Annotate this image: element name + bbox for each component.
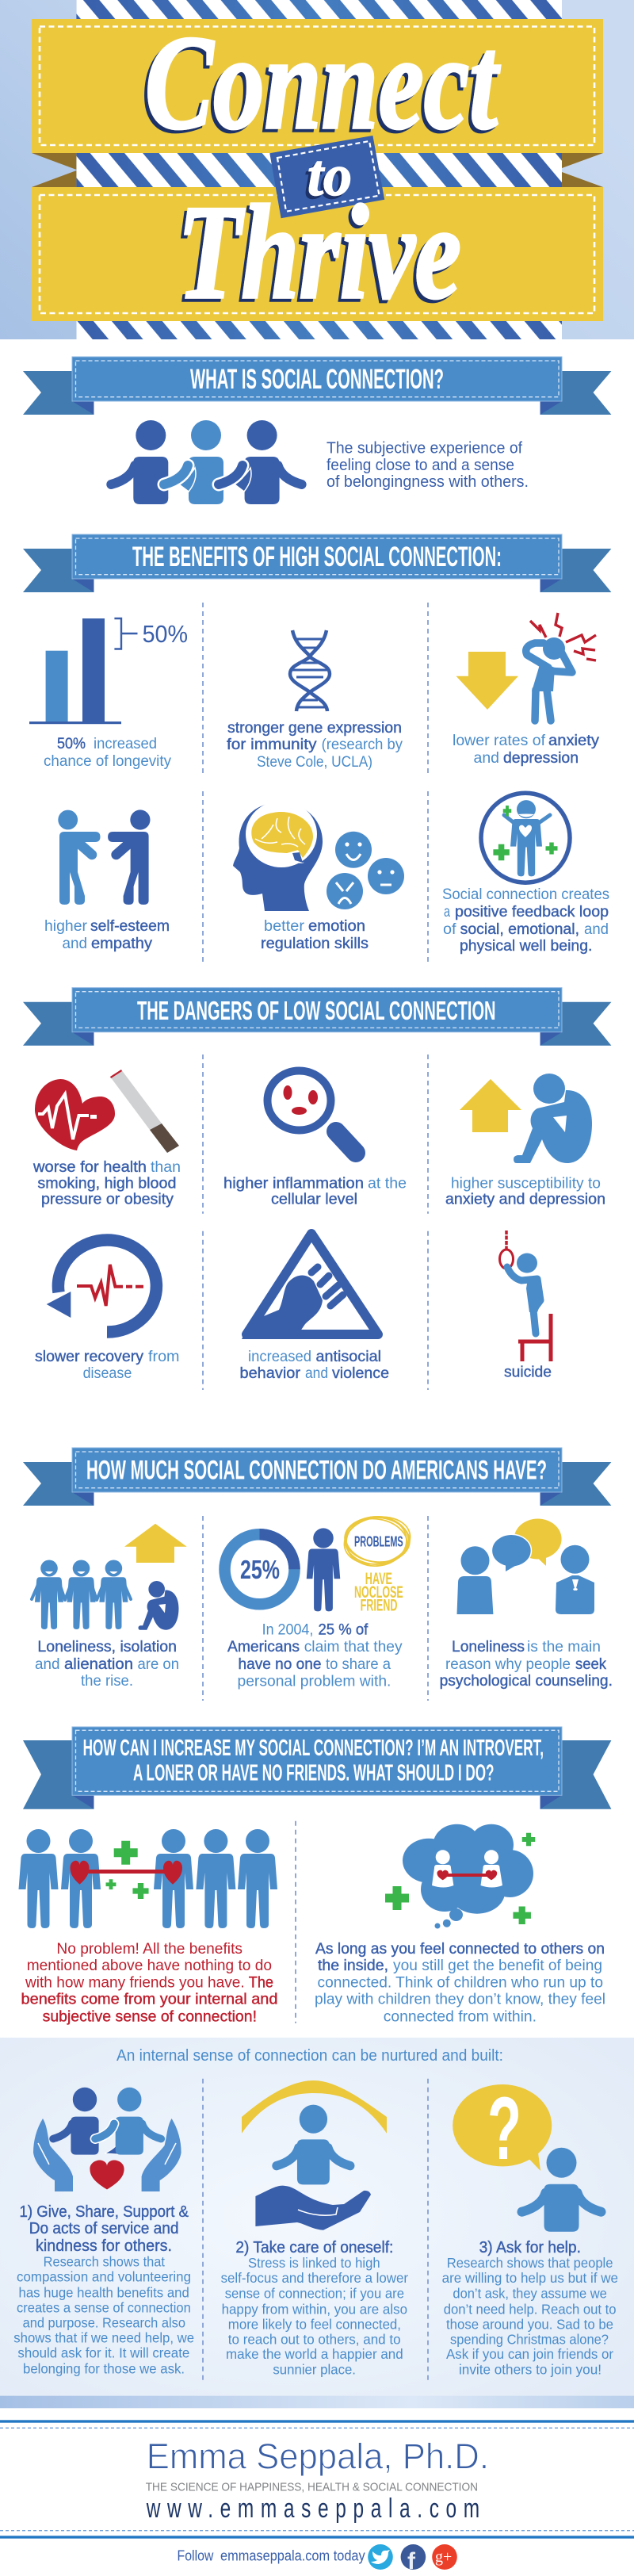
icon: heart with pulse and cigarette [35,1070,179,1153]
text: self-esteem: empathy [91,935,152,952]
icon: DNA helix [290,630,330,711]
text: ask for help: Research shows that people [447,2255,613,2271]
text: slower recovery: slower recovery [35,1348,143,1365]
icon: three people embracing [111,420,302,504]
text: have no close friend: HAVE [365,1570,392,1588]
text: loneliness on the rise: the rise. [81,1672,133,1690]
text: loneliness on the rise: are on [138,1655,179,1673]
text: feel connected on the inside: the inside, [318,1957,388,1974]
author name: Emma Seppala, Ph.D. [147,2436,489,2476]
text: anxiety and depression: and [474,749,499,767]
text: loneliness and counseling: Loneliness [452,1638,525,1655]
text: give, share, support: Do acts of service and [29,2220,179,2237]
text: self-esteem: self-esteem [90,917,170,935]
icon: down arrow and stressed person [456,613,596,721]
panel intro text: An internal sense of connection can be nurtured and built: [116,2047,503,2065]
text: give, share, support: compassion and volunteering [17,2268,191,2284]
text: give, share, support: Research shows that [44,2253,165,2269]
text: antisocial behavior: and [305,1365,328,1382]
bar chart: 50% longevity: 50% [143,620,188,648]
donut chart: 25% [225,1534,295,1604]
text: emotion regulation [261,917,369,952]
text: definition of social connection: The subjective experience of [327,440,522,457]
text: positive feedback loop [442,886,609,955]
title word: Connect: Connect [145,8,501,157]
text: gene expression: Steve Cole, UCLA) [257,753,372,771]
section banner: What is social connection [23,357,611,415]
text: take care of oneself: 2) Take care of oneself: [235,2239,393,2256]
text: positive feedback loop: physical well being. [460,937,592,955]
text: ask for help: don’t need help. Reach out to [444,2301,617,2317]
text: 25 percent of Americans: In 2004, [262,1621,313,1639]
text: take care of oneself: sunnier place. [273,2361,356,2377]
icon: hands holding two people and heart [33,2088,181,2191]
icon: facebook [401,2544,426,2574]
text: definition of social connection: of belongingness with others. [327,473,529,491]
section banner: What is social connection: WHAT IS SOCIAL CONNECTION? [190,364,444,395]
section banner: how can I increase connection [23,1727,611,1809]
text: positive feedback loop: positive feedback loop [455,903,609,921]
text: anxiety and depression: lower rates of [453,732,546,749]
text: worse for health: smoking, high blood [37,1175,176,1192]
text: worse for health: than [151,1158,181,1176]
text: longevity: increased [94,735,157,752]
icon: neutral face [368,858,404,894]
icon: noose and chair [499,1231,552,1361]
icon: head with brain and mood faces [233,801,404,911]
text: take care of oneself: happy from within, you are also [222,2301,407,2317]
text: antisocial behavior: behavior [239,1365,301,1382]
icon: person with no close friend [307,1528,340,1611]
text: slower recovery: disease [83,1365,132,1382]
social follow line [178,2544,457,2574]
text: feel connected on the inside: As long as you feel connected to others on [315,1940,605,1958]
text: self-esteem [44,917,170,952]
text: self-esteem: and [62,935,87,952]
icon: google plus [432,2544,457,2570]
panel: internal sense of connection [0,2038,634,2408]
icon: twitter [368,2544,393,2570]
text: feel connected on the inside [315,1940,605,2025]
text: positive feedback loop: social, emotional, [460,921,579,938]
text: no problem [21,1940,277,2025]
title word: Thrive: Thrive [178,178,461,327]
website: www.emmaseppala.com [146,2494,479,2524]
text: ask for help: invite others to join you! [459,2361,602,2377]
icon: smiling face [335,832,372,868]
text: antisocial behavior: increased [248,1348,311,1365]
text: give, share, support: kindness for others. [36,2237,172,2255]
text: give, share, support: shows that if we need help, we [13,2330,194,2346]
icon: recovery clock with pulse [47,1240,156,1332]
yellow banner: Thrive [32,187,603,321]
text: antisocial behavior: antisocial [315,1348,381,1365]
text: ask for help: 3) Ask for help. [479,2239,581,2256]
text: no problem: mentioned above have nothing to do [27,1957,272,1974]
donut chart: 25%: 25% [240,1555,280,1584]
text: anxiety and depression: anxiety [548,732,599,749]
text: slower recovery: from [148,1348,179,1365]
text: emotion regulation: emotion [308,917,365,935]
text: feel connected on the inside: connected. Think of children who run up to [317,1974,603,1992]
text: longevity: 50% [57,735,86,752]
text: antisocial behavior: violence [332,1365,389,1382]
text: ask for help: spending Christmas alone? [450,2331,609,2347]
icon: person under arc, held by hand [242,2080,387,2230]
text: inflammation: higher inflammation [223,1175,364,1192]
icon: healthy person in circle [481,793,570,882]
text: longevity [44,735,171,770]
text: loneliness and counseling: reason why people [445,1655,571,1673]
icon: speech bubble with question mark and person [453,2079,601,2232]
text: give, share, support: creates a sense of connection [17,2300,191,2316]
text: positive feedback loop: a [444,903,450,921]
text: worse for health: pressure or obesity [41,1191,174,1208]
text: anxiety and depression [453,732,599,767]
text: loneliness and counseling: is the main [527,1638,601,1655]
text: give, share, support: 1) Give, Share, Support & [19,2203,189,2221]
yellow banner: Connect [32,19,603,153]
text: take care of oneself: Stress is linked to high [248,2255,380,2271]
text: ask for help: are willing to help us but if we [442,2270,618,2286]
text: ask for help: Ask if you can join friends or [446,2346,613,2362]
text: 25 percent of Americans: 25 % of [319,1621,369,1639]
text: ask for help: those around you. Sad to be [446,2316,613,2332]
icon: angry face [327,873,363,909]
text: feel connected on the inside: play with children they don’t know, they feel [315,1991,605,2008]
text: give, share, support: has huge health benefits and [19,2284,189,2300]
icon: speech bubble with question mark and person: ? [487,2079,521,2178]
text: positive feedback loop: Social connection creates [442,886,609,903]
text: take care of oneself: to reach out to others, and to [228,2331,401,2347]
text: gene expression: stronger gene expression [227,719,402,737]
text: give, share, support [13,2203,194,2376]
text: worse for health: worse for health [32,1158,147,1176]
text: loneliness and counseling [440,1638,613,1690]
text: no problem: The [249,1974,273,1992]
blue tag: to [269,136,384,218]
text: no problem: subjective sense of connection! [43,2008,257,2025]
text: positive feedback loop: and [584,921,609,938]
text: 25 percent of Americans [227,1621,403,1690]
text: 25 percent of Americans: have no one [238,1655,322,1673]
text: give, share, support: and purpose. Research also [23,2315,185,2331]
text: gene expression: (research by [322,736,403,753]
text: no problem: benefits come from your internal and [21,1991,277,2008]
text: take care of oneself: self-focus and therefore a lower [221,2270,408,2286]
text: take care of oneself [221,2239,408,2377]
icon: scribbled problems circle [340,1511,414,1570]
text: take care of oneself: make the world a happier and [226,2346,403,2362]
text: loneliness and counseling: seek [575,1655,606,1673]
bar chart: 50% longevity [29,618,188,724]
text: inflammation [223,1175,407,1208]
text: take care of oneself: sense of connection; if you are [225,2285,404,2301]
text: 25 percent of Americans: personal problem with. [238,1673,391,1690]
text: loneliness on the rise: and [35,1655,60,1673]
text: slower recovery [35,1348,179,1382]
icon: scribbled problems circle: PROBLEMS [354,1534,403,1550]
text: susceptibility: higher susceptibility to [451,1175,601,1192]
text: worse for health [32,1158,181,1208]
text: no problem: No problem! All the benefits [56,1940,243,1958]
icon: thought cloud with linked hearts [385,1824,535,1928]
text: anxiety and depression: depression [503,749,579,767]
text: emotion regulation: regulation skills [261,935,369,952]
text: ask for help [442,2239,618,2377]
text: feel connected on the inside: you still get the benefit of being [393,1957,602,1974]
text: susceptibility: anxiety and depression [445,1191,605,1208]
text: 25 percent of Americans: claim that they [304,1638,403,1655]
text: suicide: suicide [504,1364,552,1381]
social follow line: emmaseppala.com today [220,2547,365,2563]
text: loneliness on the rise [35,1638,179,1690]
text: take care of oneself: more likely to feel connected, [228,2316,401,2332]
text: no problem: with how many friends you have. [25,1974,245,1992]
text: antisocial behavior [239,1348,389,1382]
text: emotion regulation: better [264,917,305,935]
text: 25 percent of Americans: Americans [227,1638,300,1655]
icon: google plus: g+ [435,2548,452,2566]
ribbon folds [32,153,603,187]
text: have no close friend: FRIEND [361,1597,398,1615]
icon: up arrow and sad person [460,1074,592,1163]
text: definition of social connection [327,440,529,491]
icon: facebook: f [407,2548,416,2574]
icon: warning triangle with fist [242,1234,378,1339]
tagline: THE SCIENCE OF HAPPINESS, HEALTH & SOCIAL CONNECTION [146,2482,478,2494]
icon: magnifying glass [268,1070,356,1153]
text: loneliness on the rise: alienation [64,1655,133,1673]
text: have no close friend: NOCLOSE [354,1583,403,1602]
striped backdrop [76,0,562,339]
section banner: benefits [23,534,611,592]
icon: counseling conversation [456,1519,594,1614]
section banner: dangers [23,988,611,1046]
blue tag: to: to [307,144,352,209]
footer: author block [0,2420,634,2539]
text: self-esteem: higher [44,917,87,935]
icon: two people reaching [58,810,150,905]
text: ask for help: don’t ask, they assume we [453,2285,607,2301]
text: have no close friend [354,1570,403,1615]
text: inflammation: at the [368,1175,407,1192]
text: loneliness on the rise: Loneliness, isolation [37,1638,177,1655]
text: gene expression [227,719,403,771]
text: definition of social connection: feeling close to and a sense [327,457,514,474]
section banner: how much connection [23,1448,611,1506]
text: give, share, support: belonging for those we ask. [23,2360,185,2376]
icon: five people with hearts linked [19,1829,277,1928]
social follow line: Follow [178,2547,214,2563]
text: inflammation: cellular level [271,1191,357,1208]
header: Connect to Thrive [0,0,634,339]
text: give, share, support: should ask for it. It will create [17,2344,189,2360]
text: feel connected on the inside: connected from within. [384,2008,537,2025]
text: 25 percent of Americans: to share a [326,1655,391,1673]
text: positive feedback loop: of [443,921,456,938]
text: susceptibility [445,1175,605,1208]
icon: group of three, arrow and isolated person [32,1524,187,1630]
text: longevity: chance of longevity [44,752,171,770]
text: gene expression: for immunity [227,736,317,753]
text: loneliness and counseling: psychological counseling. [440,1672,613,1690]
